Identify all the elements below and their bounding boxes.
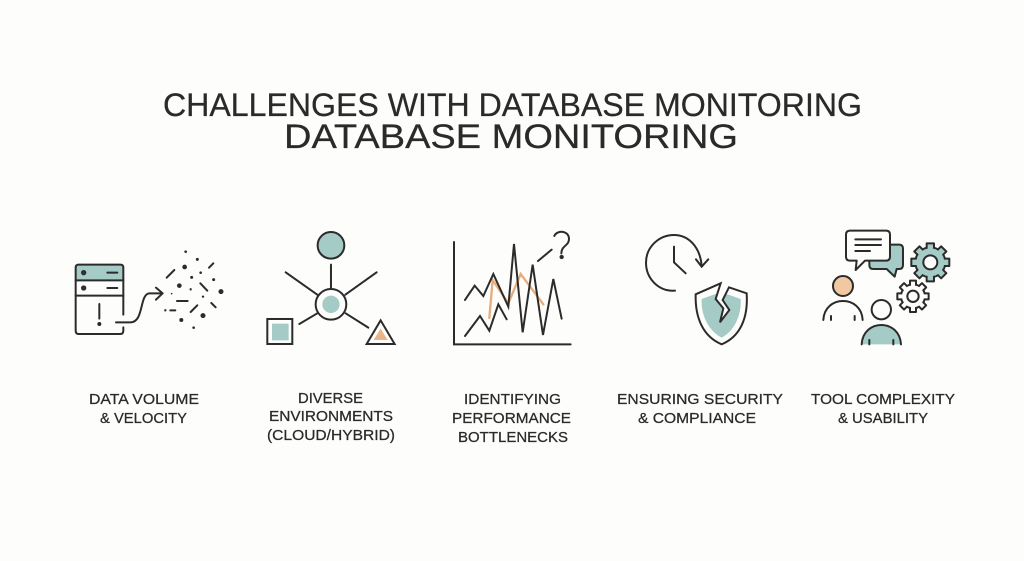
label: performance bottlenecks: PERFORMANCE bbox=[452, 411, 571, 427]
label: tool complexity: & USABILITY bbox=[838, 411, 928, 427]
icon: clock and broken shield bbox=[646, 235, 747, 344]
chat bubble: front bbox=[846, 231, 890, 270]
label: security and compliance: ENSURING SECURITY bbox=[617, 392, 783, 408]
label: data volume: & VELOCITY bbox=[100, 411, 187, 427]
title: CHALLENGES WITH DATABASE MONITORING bbox=[163, 87, 862, 123]
icon: people, chat bubbles and gears bbox=[823, 231, 949, 344]
gear: small bbox=[897, 281, 929, 312]
label: data volume: DATA VOLUME bbox=[89, 392, 199, 408]
data particles bbox=[164, 250, 223, 329]
person: teal bbox=[862, 300, 901, 344]
label: diverse environments: ENVIRONMENTS bbox=[269, 409, 393, 425]
icon: server streaming data bbox=[76, 250, 223, 334]
title: DATABASE MONITORING bbox=[284, 118, 738, 156]
label: security and compliance: & COMPLIANCE bbox=[638, 411, 756, 427]
icon: hub with diverse environments bbox=[267, 232, 395, 344]
label: diverse environments: DIVERSE bbox=[298, 391, 363, 407]
title bbox=[163, 87, 862, 156]
label: data volume bbox=[89, 392, 199, 427]
label: performance bottlenecks bbox=[452, 392, 571, 446]
label: diverse environments bbox=[267, 391, 395, 444]
icon: performance line chart with question mark bbox=[454, 232, 571, 344]
label: diverse environments: (CLOUD/HYBRID) bbox=[267, 428, 395, 444]
label: tool complexity bbox=[811, 392, 955, 427]
label: performance bottlenecks: BOTTLENECKS bbox=[458, 430, 568, 446]
person: orange bbox=[823, 276, 863, 320]
label: performance bottlenecks: IDENTIFYING bbox=[464, 392, 561, 408]
label: tool complexity: TOOL COMPLEXITY bbox=[811, 392, 955, 408]
chat bubble: back bbox=[869, 245, 903, 277]
label: security and compliance bbox=[617, 392, 783, 427]
gear: large bbox=[911, 243, 949, 281]
